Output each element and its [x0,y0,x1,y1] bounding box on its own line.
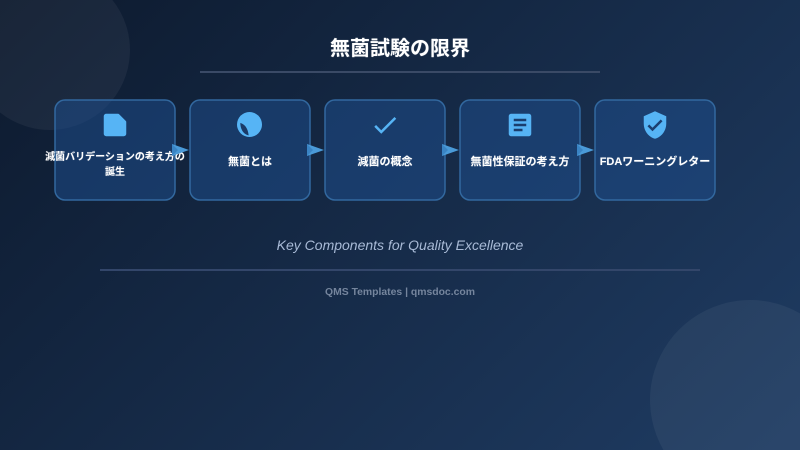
title underline [200,71,600,73]
card 5 [594,99,716,201]
label: card 1 [45,150,185,178]
label: card 3: 減菌の概念 [358,156,412,168]
decorative circle: top left [0,0,130,130]
arrow 3 [442,144,459,156]
footer divider [100,269,700,271]
icon: check [374,117,396,134]
card 4 [459,99,581,201]
label: card 2: 無菌とは [228,156,272,168]
label: card 4: 無菌性保証の考え方 [470,156,570,168]
label: card 5: FDAワーニングレター [600,156,710,168]
icon: document [104,114,126,136]
title: 無菌試験の限界 [330,38,470,60]
card 2 [189,99,311,201]
icon: shield check [644,111,666,139]
arrow 1 [172,144,189,156]
icon: circle with leaf [237,112,262,137]
footer: QMS Templates | qmsdoc.com [325,287,475,298]
icon: article [508,114,532,136]
arrow 2 [307,144,324,156]
card 1 [54,99,176,201]
label: card 1: 減菌バリデーションの考え方の [45,152,185,163]
subtitle: Key Components for Quality Excellence [277,237,523,253]
arrow 4 [577,144,594,156]
card 3 [324,99,446,201]
decorative circle: bottom right [650,300,800,450]
label: card 1: 誕生 [105,167,125,178]
